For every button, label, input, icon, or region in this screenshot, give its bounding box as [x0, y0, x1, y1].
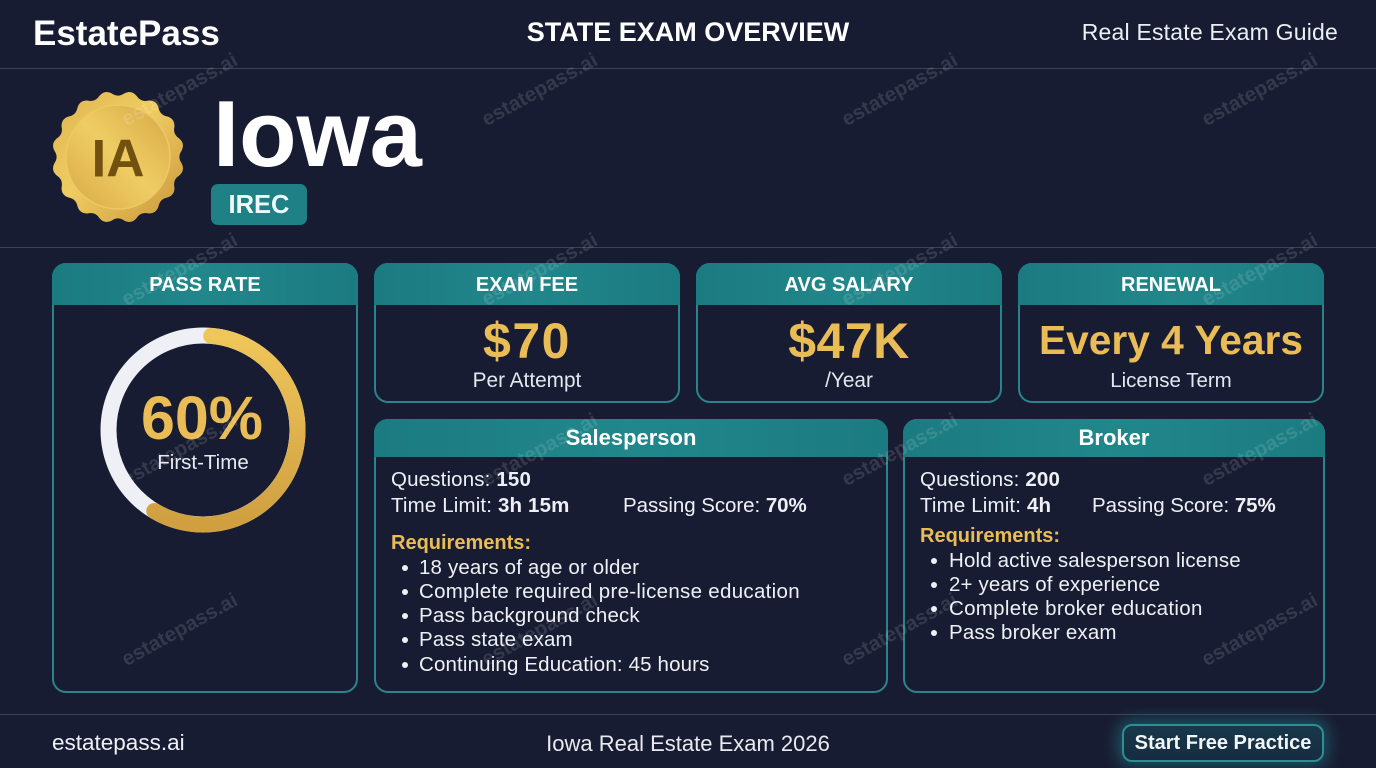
- broker requirements: Pass broker exam: [949, 621, 1117, 644]
- text: estatepass.ai: [118, 408, 242, 491]
- broker requirements: Hold active salesperson license: [949, 549, 1241, 572]
- agency badge: IREC: [229, 191, 289, 219]
- renewal heading: [1018, 263, 1324, 305]
- exam fee value: $70: [483, 313, 571, 369]
- broker requirements: 2+ years of experience: [949, 573, 1160, 596]
- salary value: $47K: [788, 313, 910, 369]
- salesperson requirements: Requirements:: [391, 532, 531, 554]
- text: estatepass.ai: [838, 588, 962, 671]
- salesperson requirements: [391, 532, 800, 676]
- panel: exam fee: [374, 263, 680, 403]
- broker requirements: [920, 525, 1241, 644]
- text: estatepass.ai: [1198, 408, 1322, 491]
- salesperson requirements: Pass background check: [419, 604, 640, 627]
- panel: pass rate: [52, 263, 358, 693]
- salesperson requirements: Continuing Education: 45 hours: [419, 653, 710, 676]
- salary heading: [696, 263, 1002, 305]
- panel: renewal: [1018, 263, 1324, 403]
- salesperson exam facts: Questions: 150: [391, 468, 531, 491]
- broker exam facts: Passing Score: 75%: [1092, 494, 1276, 517]
- broker heading: [903, 419, 1325, 457]
- text: estatepass.ai: [838, 48, 962, 131]
- salary caption: /Year: [825, 369, 873, 392]
- footer: site: estatepass.ai: [52, 730, 185, 755]
- footer: exam title: Iowa Real Estate Exam 2026: [546, 731, 830, 756]
- renewal value: Every 4 Years: [1039, 317, 1303, 363]
- icon: gold state seal: [53, 92, 183, 222]
- panel: salesperson: [374, 419, 888, 693]
- button: start free practice: Start Free Practice: [1135, 732, 1311, 754]
- button: start free practice: [1122, 724, 1324, 762]
- icon: gold state seal: IA: [92, 130, 144, 188]
- broker requirements: Requirements:: [920, 525, 1060, 547]
- pass rate value: 60%: [141, 384, 263, 452]
- salesperson exam facts: Passing Score: 70%: [623, 494, 807, 517]
- salesperson requirements: Pass state exam: [419, 628, 573, 651]
- text: estatepass.ai: [1198, 588, 1322, 671]
- broker exam facts: Time Limit: 4h: [920, 494, 1051, 517]
- text: estatepass.ai: [478, 588, 602, 671]
- salesperson heading: Salesperson: [566, 425, 696, 450]
- text: estatepass.ai: [1198, 228, 1322, 311]
- broker exam facts: [920, 468, 1276, 517]
- pass rate caption: First-Time: [157, 451, 249, 474]
- exam fee caption: Per Attempt: [473, 369, 581, 392]
- text: estatepass.ai: [118, 228, 242, 311]
- text: estatepass.ai: [478, 228, 602, 311]
- pass rate heading: PASS RATE: [149, 274, 261, 296]
- broker heading: Broker: [1079, 425, 1149, 450]
- chart: pass rate ring: [100, 328, 306, 533]
- header: brand: EstatePass: [33, 14, 220, 53]
- exam fee heading: [374, 263, 680, 305]
- broker requirements: Complete broker education: [949, 597, 1203, 620]
- salary heading: AVG SALARY: [785, 274, 913, 296]
- salesperson exam facts: Time Limit: 3h 15m: [391, 494, 570, 517]
- panel: average salary: [696, 263, 1002, 403]
- salesperson exam facts: [391, 468, 807, 517]
- text: estatepass.ai: [478, 48, 602, 131]
- state name: Iowa: [213, 81, 422, 186]
- salesperson requirements: Complete required pre-license education: [419, 580, 800, 603]
- pass rate heading: [52, 263, 358, 305]
- salesperson heading: [374, 419, 888, 457]
- text: estatepass.ai: [118, 588, 242, 671]
- salesperson requirements: 18 years of age or older: [419, 556, 639, 579]
- renewal heading: RENEWAL: [1121, 274, 1221, 296]
- text: estatepass.ai: [838, 408, 962, 491]
- text: estatepass.ai: [118, 48, 242, 131]
- renewal caption: License Term: [1110, 369, 1232, 392]
- panel: broker: [903, 419, 1325, 693]
- broker exam facts: Questions: 200: [920, 468, 1060, 491]
- exam fee heading: EXAM FEE: [476, 274, 578, 296]
- header: title: STATE EXAM OVERVIEW: [527, 17, 849, 47]
- text: estatepass.ai: [478, 408, 602, 491]
- header: guide label: Real Estate Exam Guide: [1082, 19, 1338, 45]
- text: estatepass.ai: [1198, 48, 1322, 131]
- agency badge: [211, 184, 307, 225]
- text: estatepass.ai: [838, 228, 962, 311]
